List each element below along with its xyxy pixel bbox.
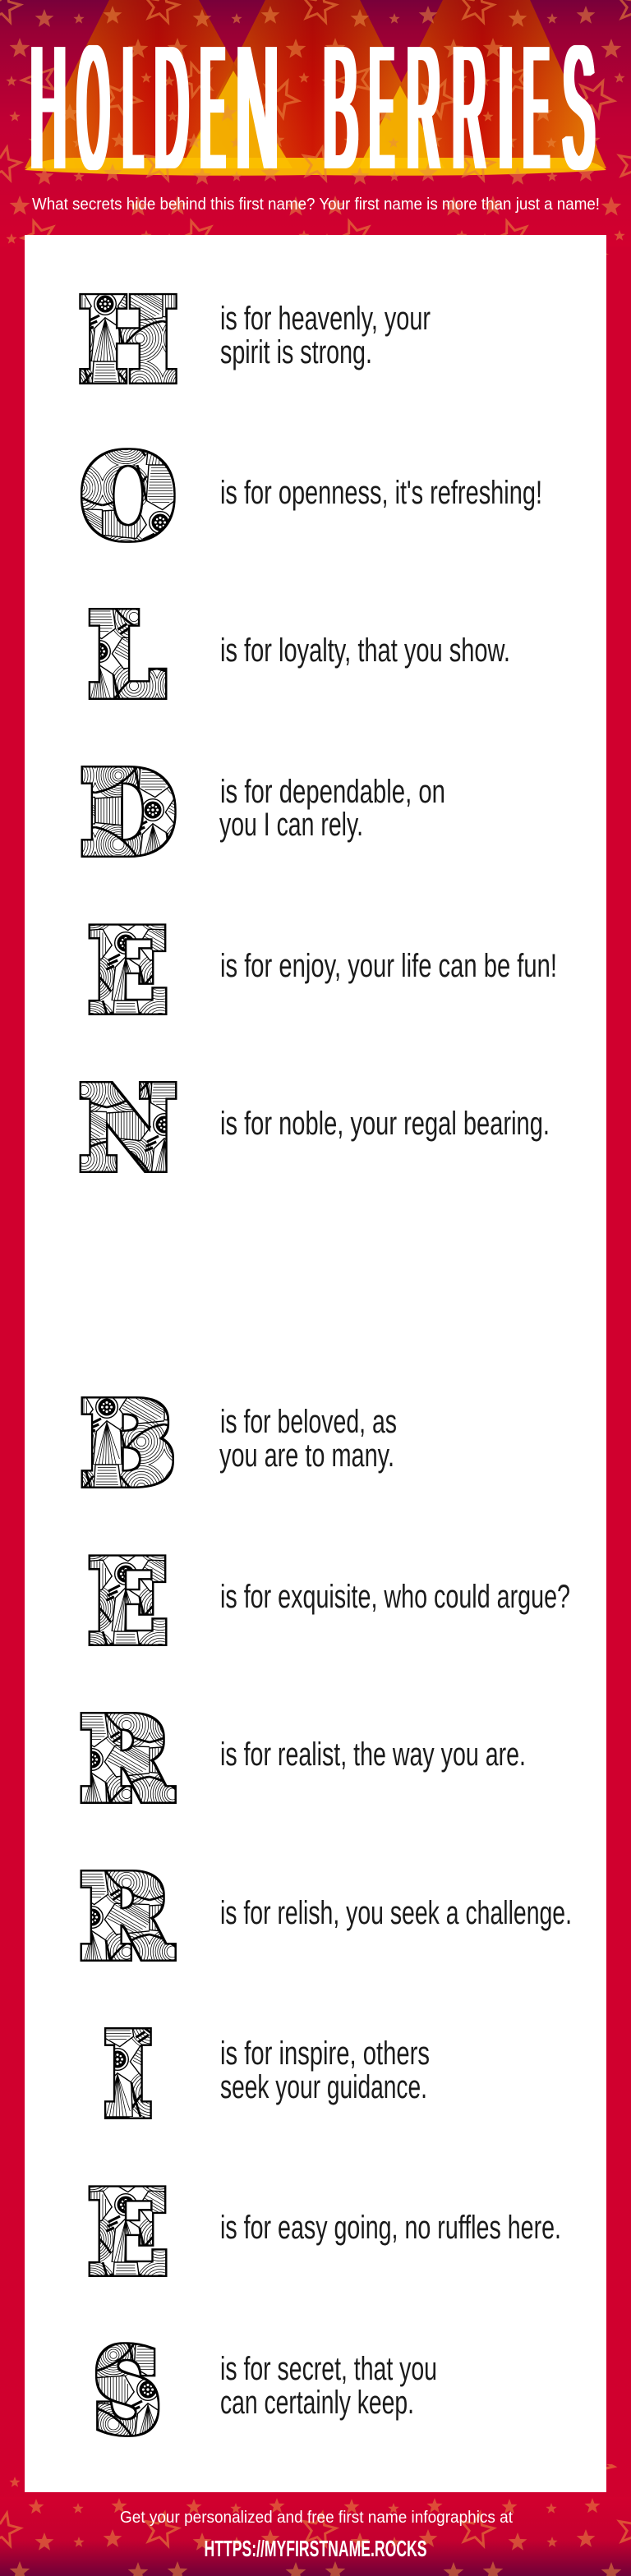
icon: letter E: E bbox=[88, 904, 168, 1038]
text: I bbox=[220, 2036, 430, 2105]
row: E bbox=[88, 2165, 561, 2300]
title: E bbox=[523, 8, 549, 206]
text: D: you I can rely. bbox=[219, 807, 363, 843]
row: I bbox=[105, 2011, 430, 2139]
icon: letter N: N bbox=[81, 1065, 175, 1193]
icon: letter H: H bbox=[79, 275, 177, 407]
footer url: HTTPS://MYFIRSTNAME.ROCKS bbox=[204, 2536, 427, 2561]
text: B: you are to many. bbox=[219, 1438, 394, 1474]
title: I bbox=[497, 9, 514, 207]
title: D bbox=[154, 10, 188, 207]
title: R bbox=[408, 10, 440, 207]
footer text: Get your personalized and free first name infographics at bbox=[120, 2509, 513, 2527]
icon: letter D: D bbox=[82, 749, 175, 877]
text: D bbox=[219, 774, 445, 843]
spotlights bbox=[25, 0, 606, 176]
title: N bbox=[236, 8, 279, 206]
title: B bbox=[324, 9, 358, 206]
row: N bbox=[81, 1065, 550, 1193]
icon: letter S: S bbox=[94, 2328, 159, 2456]
text: S bbox=[220, 2351, 437, 2421]
row: E bbox=[88, 1534, 570, 1669]
text: I: is for inspire, others bbox=[220, 2036, 430, 2072]
text: D: is for dependable, on bbox=[220, 774, 445, 810]
row: E bbox=[88, 904, 557, 1038]
icon: letter E: E bbox=[88, 2165, 168, 2300]
icon: letter R: R bbox=[81, 1695, 171, 1824]
text: B: is for beloved, as bbox=[220, 1404, 397, 1440]
title: R bbox=[453, 10, 486, 207]
text: H: is for heavenly, your bbox=[220, 301, 431, 337]
text: H bbox=[220, 301, 431, 370]
icon: letter O: O bbox=[82, 434, 174, 562]
title: L bbox=[123, 8, 142, 206]
text: S: can certainly keep. bbox=[220, 2385, 414, 2421]
text: I: seek your guidance. bbox=[220, 2069, 427, 2105]
title bbox=[30, 8, 594, 207]
icon: letter I: I bbox=[105, 2011, 150, 2139]
icon: letter E: E bbox=[88, 1534, 168, 1669]
row: R bbox=[81, 1853, 572, 1981]
title: E bbox=[371, 9, 393, 206]
row: R bbox=[81, 1695, 526, 1824]
text: B bbox=[219, 1404, 397, 1474]
row: L bbox=[90, 591, 510, 720]
text: L: is for loyalty, that you show. bbox=[220, 632, 510, 669]
row: D bbox=[82, 749, 445, 877]
title: S bbox=[564, 10, 594, 207]
icon: letter R: R bbox=[81, 1853, 171, 1981]
star pattern: bottom bbox=[0, 2464, 631, 2576]
row: O bbox=[82, 434, 542, 562]
row: S bbox=[94, 2328, 437, 2456]
star pattern: top bbox=[0, 0, 631, 255]
title: H bbox=[30, 10, 66, 206]
row: H bbox=[79, 275, 431, 407]
icon: letter L: L bbox=[90, 591, 164, 720]
row: B bbox=[82, 1380, 397, 1508]
title: E bbox=[201, 9, 224, 206]
text: S: is for secret, that you bbox=[220, 2351, 437, 2387]
subtitle: What secrets hide behind this first name? Your first name is more than just a name! bbox=[32, 196, 600, 214]
title: O bbox=[78, 10, 108, 207]
icon: letter B: B bbox=[82, 1380, 174, 1508]
text: H: spirit is strong. bbox=[220, 334, 372, 370]
